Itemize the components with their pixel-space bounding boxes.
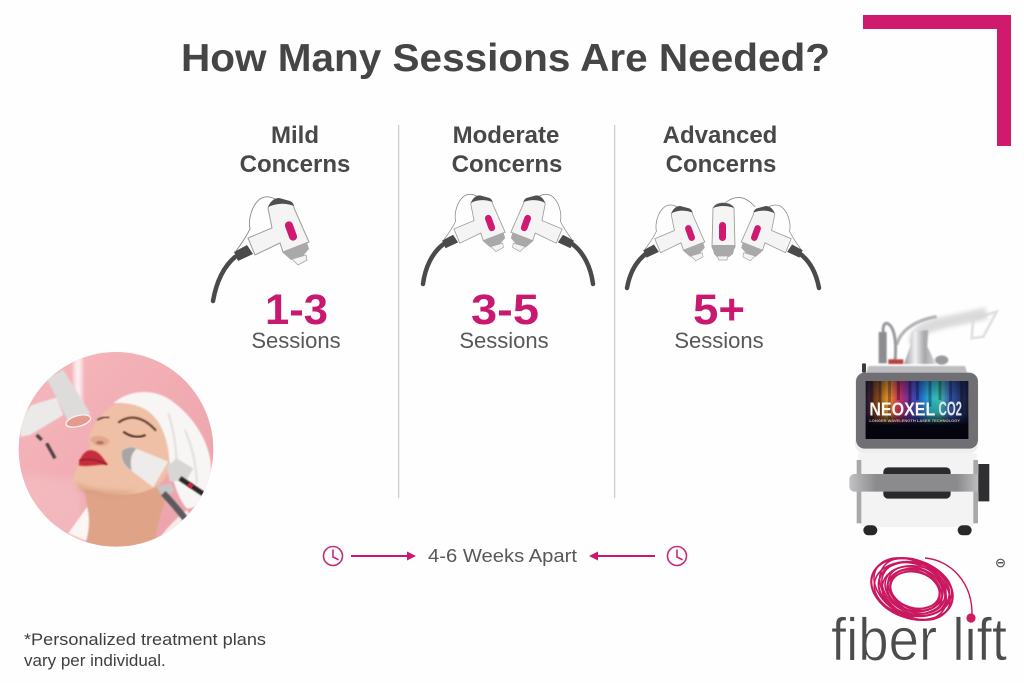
side clip bbox=[978, 464, 989, 501]
heading: advanced concerns: Advanced bbox=[663, 122, 777, 149]
heading: mild concerns: Mild bbox=[271, 122, 319, 149]
screen bezel bbox=[855, 373, 978, 453]
machine arm bbox=[862, 312, 997, 373]
panel: moderate concerns bbox=[423, 122, 593, 353]
arrow: left bbox=[589, 552, 655, 560]
divider bbox=[614, 125, 615, 498]
logo wordmark: fiber lift bbox=[831, 606, 1007, 673]
arrow: right bbox=[351, 552, 416, 560]
icon: three handpieces bbox=[627, 197, 819, 288]
panel: mild concerns bbox=[213, 122, 350, 353]
side band bbox=[849, 474, 984, 492]
label: sessions: Sessions bbox=[674, 328, 764, 353]
trademark bbox=[997, 559, 1004, 567]
footnote: vary per individual. bbox=[24, 651, 166, 670]
photo: facial treatment bbox=[17, 350, 217, 553]
machine body bbox=[858, 453, 977, 527]
interval row: 4-6 weeks apart bbox=[324, 546, 686, 566]
heading: moderate concerns: Concerns bbox=[452, 151, 562, 178]
icon: clock right bbox=[668, 546, 686, 566]
label: sessions: Sessions bbox=[251, 328, 341, 353]
screen: CO2 bbox=[939, 398, 962, 420]
number: 1-3: 1-3 bbox=[265, 286, 328, 334]
corner bracket accent bbox=[863, 15, 1011, 146]
footnote: *Personalized treatment plans bbox=[24, 630, 266, 649]
number: 5+: 5+ bbox=[693, 286, 745, 334]
dark slot bbox=[883, 467, 951, 499]
screen: LONGER WAVELENGTH LASER TECHNOLOGY bbox=[869, 418, 960, 423]
top plate bbox=[866, 366, 967, 373]
icon: single handpiece bbox=[213, 197, 309, 301]
logo: fiber lift bbox=[831, 545, 1007, 673]
label: sessions: Sessions bbox=[459, 328, 549, 353]
icon: clock left bbox=[324, 546, 342, 566]
heading: advanced concerns: Concerns bbox=[666, 151, 776, 178]
screen bbox=[866, 381, 968, 439]
divider bbox=[398, 125, 399, 498]
icon: two handpieces bbox=[423, 194, 593, 284]
screen: NEOXEL bbox=[869, 398, 935, 419]
heading: moderate concerns: Moderate bbox=[453, 122, 559, 149]
text: weeks apart: 4-6 Weeks Apart bbox=[428, 546, 577, 566]
title: How Many Sessions Are Needed? bbox=[181, 37, 830, 80]
feet bbox=[863, 525, 877, 535]
panel: advanced concerns bbox=[627, 122, 819, 353]
heading: mild concerns: Concerns bbox=[240, 151, 350, 178]
machine: Neoxel CO2 device bbox=[849, 312, 997, 535]
logo dot bbox=[966, 613, 976, 623]
number: 3-5: 3-5 bbox=[471, 286, 539, 334]
logo coil bbox=[863, 545, 972, 633]
